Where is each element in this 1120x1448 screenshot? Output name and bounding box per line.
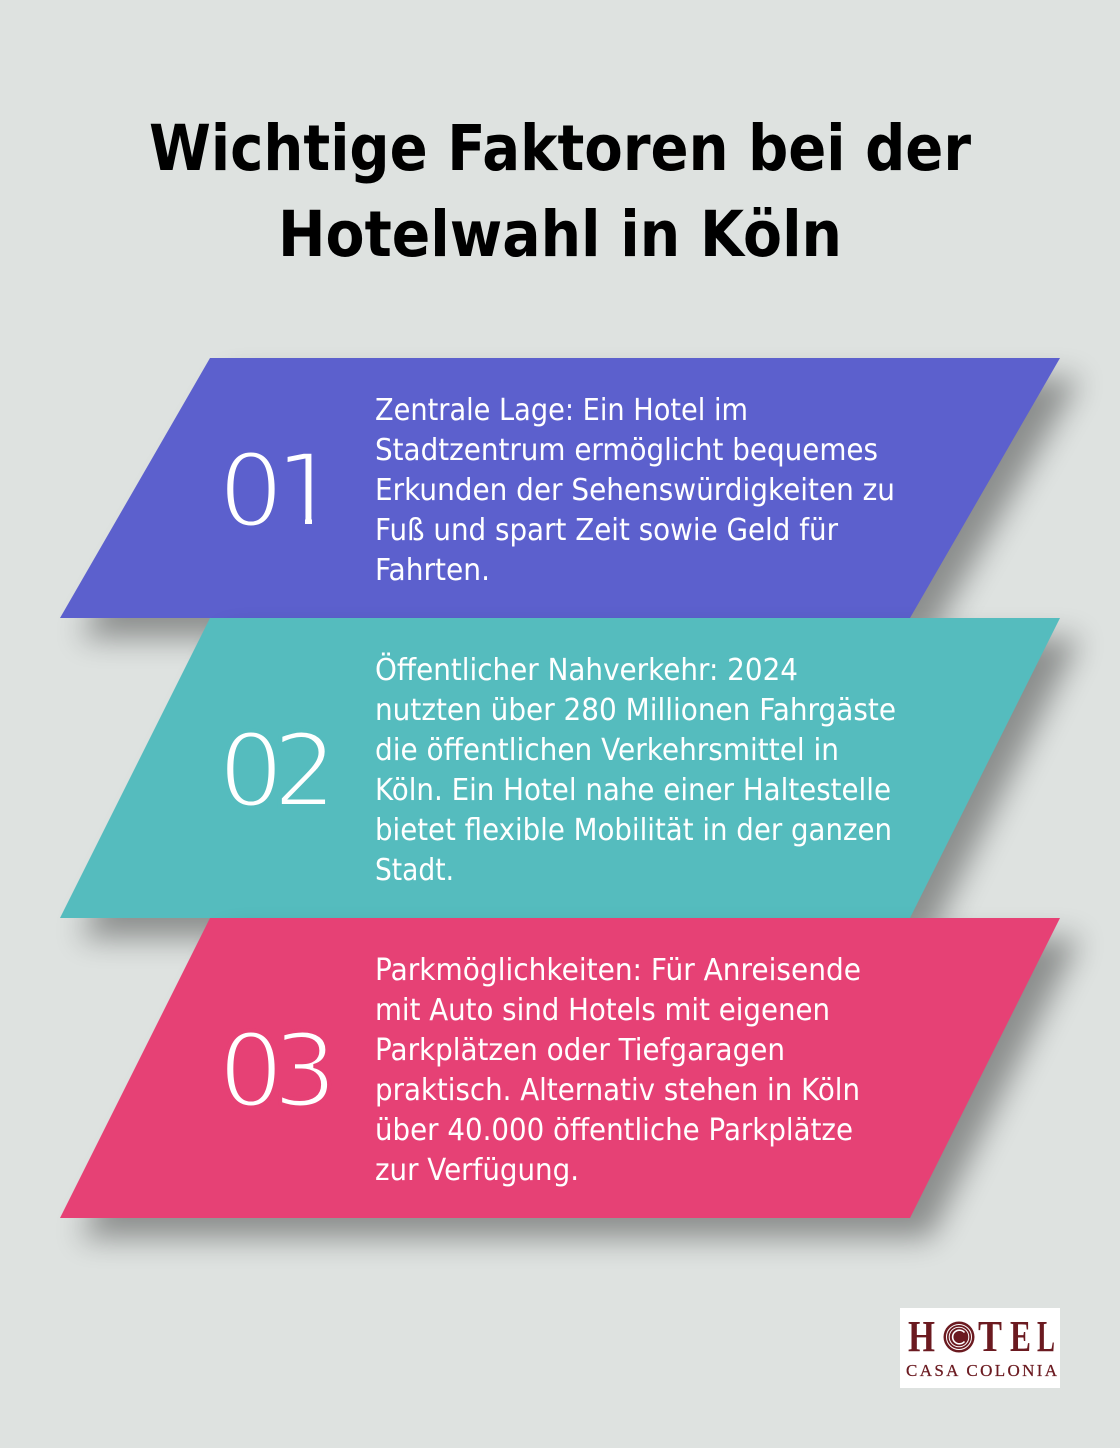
text block 02: nutzten über 280 Millionen Fahrgäste (375, 693, 896, 728)
text block 03: praktisch. Alternativ stehen in Köln (375, 1073, 860, 1108)
text block 01: Stadtzentrum ermöglicht bequemes (375, 433, 878, 468)
logo wordmark HOTEL: H (908, 1312, 935, 1361)
title (149, 112, 971, 271)
logo wordmark HOTEL: L (1037, 1312, 1055, 1361)
text block 03: zur Verfügung. (375, 1153, 579, 1188)
panel shape teal (60, 618, 1060, 918)
text block 03: über 40.000 öffentliche Parkplätze (375, 1113, 853, 1148)
panel: 02 Öffentlicher Nahverkehr (60, 618, 1080, 938)
text block 03: Parkmöglichkeiten: Für Anreisende (375, 953, 861, 988)
text block 02: die öffentlichen Verkehrsmittel in (375, 733, 839, 768)
text block 03: Parkplätzen oder Tiefgaragen (375, 1033, 785, 1068)
logo wordmark HOTEL: E (1010, 1312, 1031, 1361)
text block 02: Köln. Ein Hotel nahe einer Haltestelle (375, 773, 891, 808)
panel shape purple (60, 358, 1060, 618)
logo wordmark HOTEL (908, 1312, 1055, 1361)
text block 01 (375, 393, 895, 588)
text block 01: Erkunden der Sehenswürdigkeiten zu (375, 473, 895, 508)
number 01: 01 (218, 432, 330, 551)
text block 01: Fuß und spart Zeit sowie Geld für (375, 513, 839, 548)
text block 02: bietet flexible Mobilität in der ganzen (375, 813, 892, 848)
number 02: 02 (218, 712, 327, 831)
logo wordmark HOTEL: T (978, 1312, 1002, 1361)
icon: logo spiral circle (944, 1322, 974, 1352)
logo: Hotel Casa Colonia (900, 1308, 1060, 1388)
text block 01: Fahrten. (375, 553, 490, 588)
text block 02 (375, 652, 896, 888)
title: Hotelwahl in Köln (278, 198, 842, 271)
number 03: 03 (218, 1012, 329, 1131)
panel: 01 Zentrale Lage (60, 358, 1080, 638)
logo subtitle: CASA COLONIA (906, 1361, 1058, 1380)
text block 03 (375, 953, 861, 1188)
text block 01: Zentrale Lage: Ein Hotel im (375, 393, 748, 428)
text block 02: Öffentlicher Nahverkehr: 2024 (375, 652, 798, 688)
panel: 03 Parkmöglichkeiten (60, 918, 1080, 1238)
text block 02: Stadt. (375, 853, 454, 888)
title: Wichtige Faktoren bei der (149, 112, 971, 185)
panel shape pink (60, 918, 1060, 1218)
text block 03: mit Auto sind Hotels mit eigenen (375, 993, 830, 1028)
